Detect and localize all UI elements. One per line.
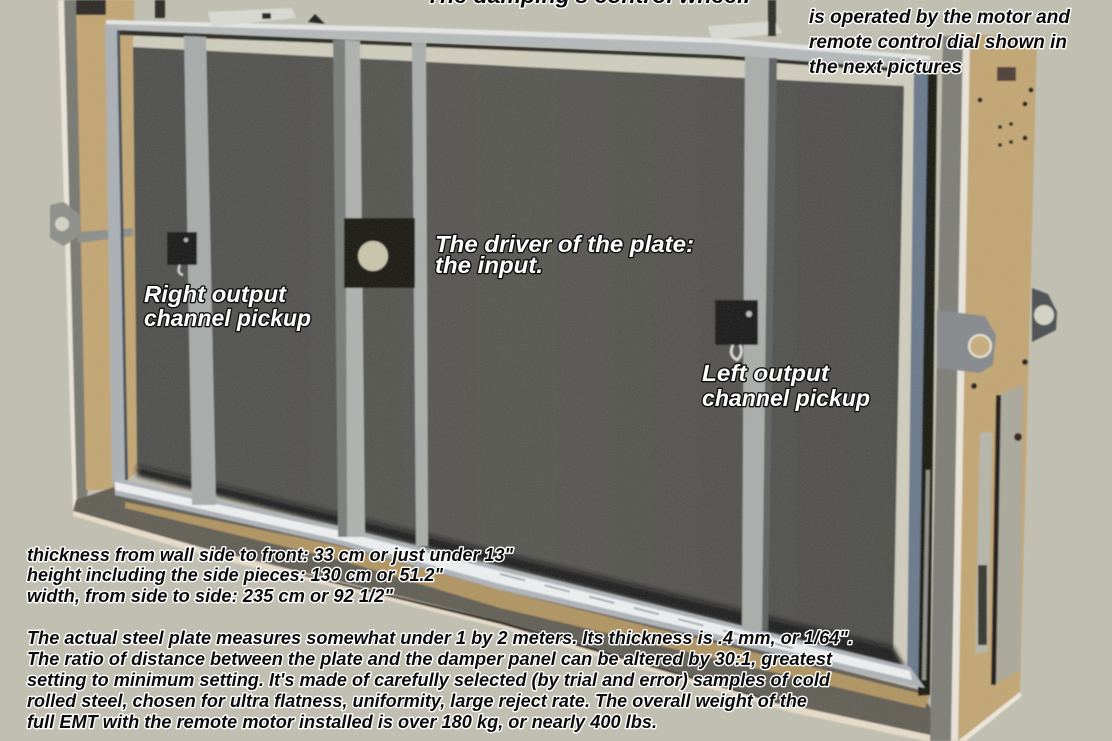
steel plate description: full EMT with the remote motor installed is over 180 kg, or nearly 400 lbs. [27,712,657,732]
label: input driver: the input. [435,252,543,278]
label: right output channel pickup: channel pickup [144,305,311,331]
top frame rail [106,20,932,72]
right side panel [930,34,1057,741]
bottom frame rail [115,478,925,688]
caption: remote motor note [809,7,1070,78]
steel plate description: The ratio of distance between the plate and the damper panel can be altered by 30:1, greatest [27,649,833,669]
steel plate description: The actual steel plate measures somewhat under 1 by 2 meters. Its thickness is .4 mm, or 1/64". [27,628,853,648]
steel plate [133,47,904,648]
dimensions text: width, from side to side: 235 cm or 92 1/2" [27,586,393,606]
steel plate description: setting to minimum setting. It's made of carefully selected (by trial and error) samples of cold [27,670,831,690]
label: input driver: The driver of the plate: [435,231,694,257]
caption: remote motor note: is operated by the motor and [809,7,1070,28]
label: left output channel pickup: Left output [702,360,830,386]
input driver [344,218,415,288]
label: left output channel pickup [702,360,870,411]
top clamps [208,0,782,40]
backing strips around plate [133,36,930,670]
dimensions text: thickness from wall side to front: 33 cm or just under 13" [27,545,513,565]
caption: remote motor note: remote control dial shown in [809,32,1067,53]
vertical struts [184,36,777,630]
label: input driver [435,231,694,278]
bottom outer frame [73,485,950,741]
label: right output channel pickup [144,281,311,331]
steel plate description [27,628,853,732]
left side panel [50,0,165,512]
left output pickup [715,300,758,360]
dimensions text: height including the side pieces: 130 cm or 51.2" [27,565,443,585]
dimensions text [27,545,513,606]
label: right output channel pickup: Right output [144,281,287,307]
steel plate description: rolled steel, chosen for ultra flatness, uniformity, large reject rate. The overall weight of the [27,691,807,711]
plate bottom shadow [137,465,905,668]
caption: remote motor note: the next pictures [809,57,962,78]
right output pickup [167,232,197,275]
left and right vertical tubes [105,26,126,484]
label: left output channel pickup: channel pickup [702,385,870,411]
